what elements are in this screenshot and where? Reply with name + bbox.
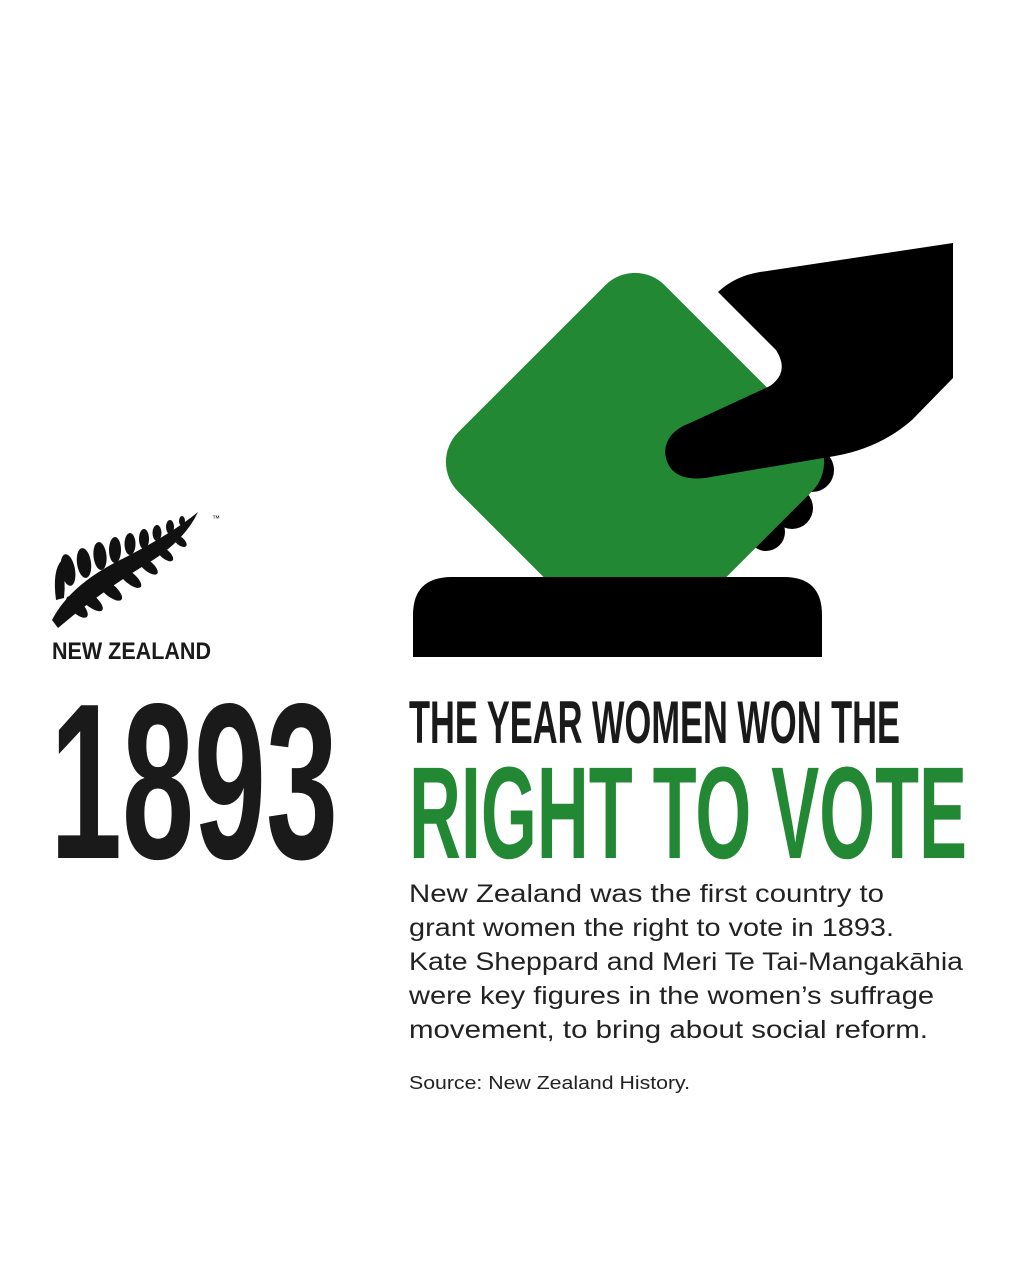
logo wordmark: NEW ZEALAND bbox=[52, 638, 211, 665]
body text: grant women the right to vote in 1893. bbox=[409, 914, 894, 942]
headline bbox=[409, 689, 967, 886]
body text: New Zealand was the first country to bbox=[409, 880, 884, 908]
icon: ballot box with hand bbox=[413, 243, 953, 668]
icon: green ballot paper bbox=[429, 256, 841, 668]
source note: Source: New Zealand History. bbox=[409, 1073, 690, 1093]
logo: silver fern New Zealand bbox=[52, 512, 220, 665]
icon: hand bbox=[665, 243, 953, 478]
big year number: 1893 bbox=[50, 658, 338, 906]
icon: silver fern bbox=[52, 512, 198, 628]
icon: ballot box slot bbox=[413, 577, 822, 657]
body text: Kate Sheppard and Meri Te Tai-Mangakāhia bbox=[409, 948, 963, 976]
icon: hand knuckles bbox=[747, 448, 834, 551]
body text bbox=[408, 880, 963, 1044]
body text: were key figures in the women’s suffrage bbox=[408, 982, 934, 1010]
body text: movement, to bring about social reform. bbox=[409, 1016, 928, 1044]
trademark symbol: ™ bbox=[212, 514, 220, 523]
